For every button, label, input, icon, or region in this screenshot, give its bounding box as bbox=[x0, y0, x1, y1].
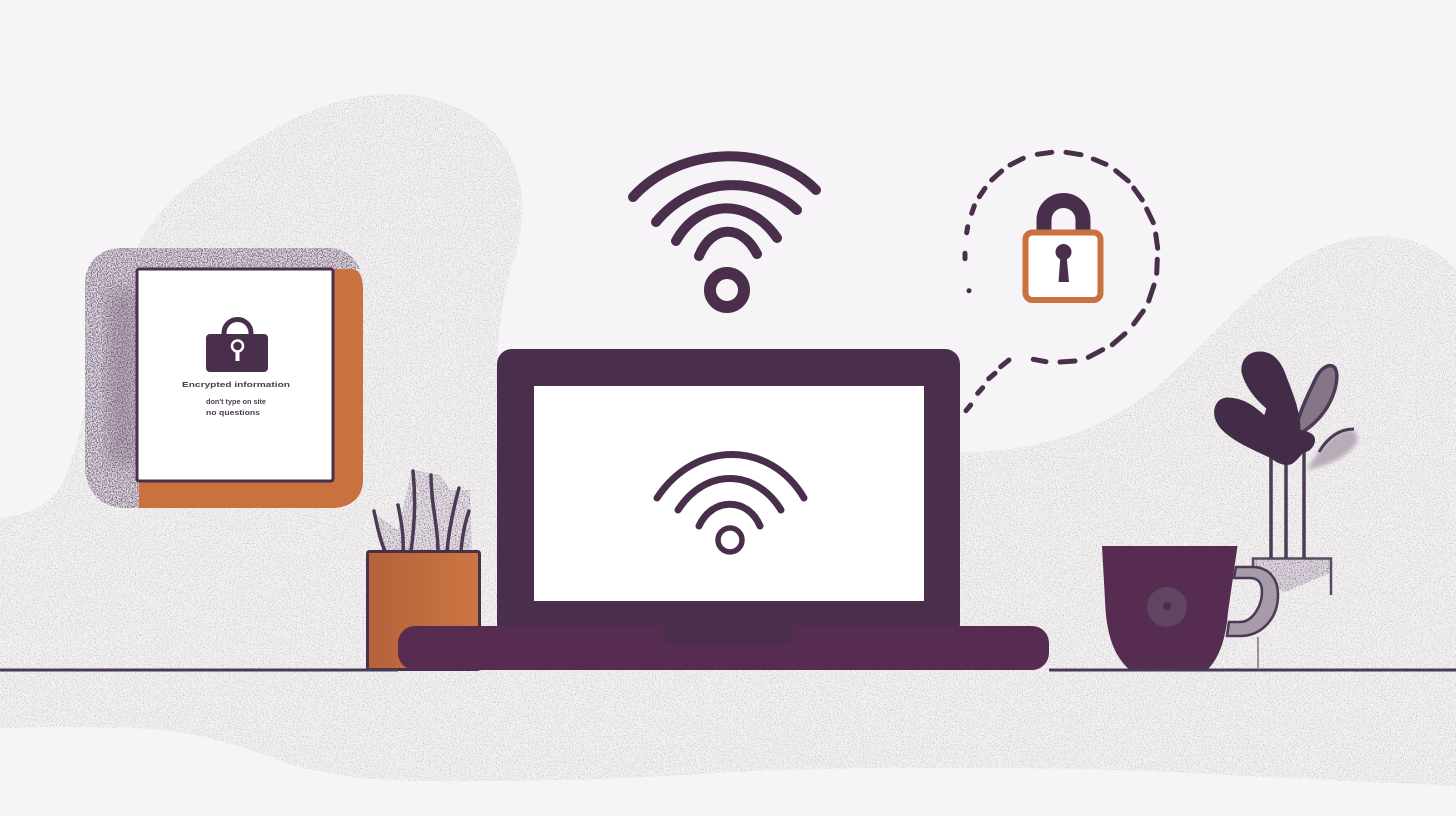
drip line under handle bbox=[1257, 637, 1259, 668]
poster text: don't type on site bbox=[206, 397, 266, 406]
icon: padlock bbox=[1026, 200, 1100, 300]
icon: large wifi signal bbox=[633, 156, 816, 307]
poster white sheet bbox=[137, 269, 333, 481]
wall poster with lock bbox=[85, 248, 363, 508]
small leaf bbox=[1307, 429, 1357, 470]
coffee mug bbox=[1102, 546, 1278, 670]
laptop bbox=[398, 349, 1049, 670]
plant on stand bbox=[1216, 353, 1357, 595]
stems bbox=[1271, 450, 1304, 558]
mug emblem bbox=[1147, 587, 1187, 627]
poster text bbox=[182, 380, 291, 417]
pencil pot with plant stems bbox=[368, 470, 480, 670]
poster text: no questions bbox=[206, 408, 260, 417]
poster lock icon bbox=[206, 320, 268, 372]
mug handle bbox=[1227, 567, 1278, 636]
plant stems bbox=[374, 471, 469, 551]
laptop base bbox=[398, 626, 1049, 670]
poster speckled shadow bbox=[85, 248, 360, 508]
laptop screen bbox=[534, 386, 924, 601]
dashed speech bubble bbox=[965, 152, 1158, 411]
poster text: Encrypted information bbox=[182, 380, 291, 389]
mug body bbox=[1102, 546, 1238, 670]
poster orange backing bbox=[139, 269, 363, 508]
dark leaves bbox=[1216, 353, 1314, 463]
stand bbox=[1253, 558, 1332, 595]
table line bbox=[0, 668, 1456, 672]
laptop lid bbox=[497, 349, 960, 639]
grey leaf bbox=[1295, 366, 1337, 437]
speckled foliage shadow bbox=[376, 470, 472, 551]
icon: screen wifi bbox=[657, 454, 804, 552]
pot bbox=[368, 552, 480, 670]
laptop notch bbox=[663, 626, 793, 645]
